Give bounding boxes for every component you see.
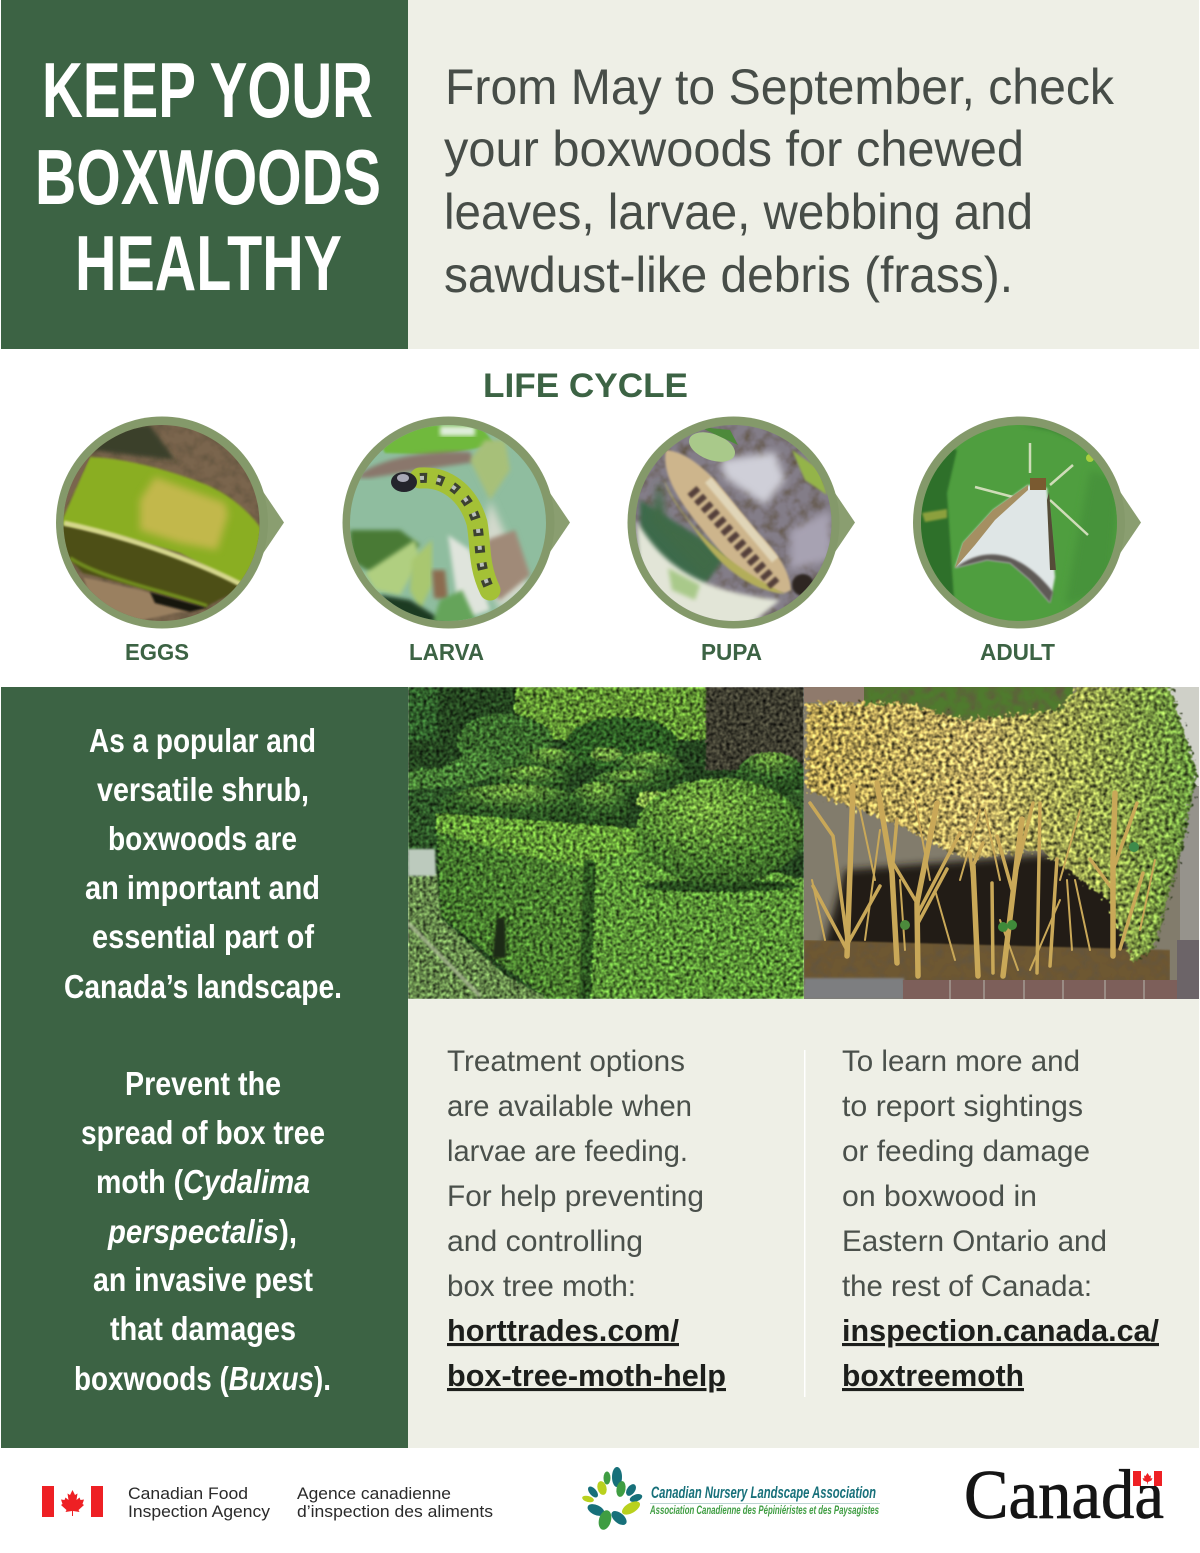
logo: Canadian Food Inspection Agency: Agence canadienne	[297, 1484, 451, 1503]
icon: leaf tree	[581, 1467, 643, 1531]
logo: Canadian Nursery Landscape Association: Canadian Nursery Landscape Association	[651, 1483, 876, 1502]
heading: keep your boxwoods healthy	[35, 46, 381, 307]
text: treatment options: and controlling	[447, 1225, 643, 1258]
text: prevent the spread	[74, 1065, 331, 1397]
logo: Canadian Food Inspection Agency: Inspection Agency	[128, 1502, 271, 1521]
text: report sightings	[842, 1045, 1159, 1393]
text: prevent the spread: spread of box tree	[81, 1114, 325, 1151]
text: importance of boxwoods: As a popular and	[89, 722, 316, 759]
text: prevent the spread: perspectalis),	[107, 1213, 297, 1250]
text: prevent the spread: an invasive pest	[93, 1261, 313, 1298]
photo: eggs on leaf	[60, 420, 265, 625]
intro text: your boxwoods for chewed	[444, 121, 1024, 177]
logo: Canadian Food Inspection Agency	[42, 1484, 493, 1521]
text: treatment options: larvae are feeding.	[447, 1135, 688, 1168]
logo: Canadian Nursery Landscape Association	[581, 1467, 880, 1531]
intro text: sawdust-like debris (frass).	[444, 247, 1013, 303]
photo: larva on webbing	[345, 420, 550, 625]
photo: healthy boxwood garden	[400, 680, 810, 1010]
icon: wordmark flag	[1133, 1471, 1162, 1486]
text: report sightings: the rest of Canada:	[842, 1270, 1092, 1303]
text: treatment options: are available when	[447, 1090, 692, 1123]
label: larva: LARVA	[409, 639, 484, 665]
text: prevent the spread: that damages	[110, 1310, 296, 1347]
panel: intro	[408, 0, 1199, 349]
text: treatment options	[447, 1045, 726, 1393]
text: report sightings: boxtreemoth	[842, 1358, 1024, 1393]
text: importance of boxwoods: versatile shrub,	[97, 771, 309, 808]
text: treatment options: horttrades.com/	[447, 1313, 679, 1348]
text: importance of boxwoods: boxwoods are	[108, 820, 297, 857]
text: importance of boxwoods	[64, 722, 342, 1005]
panel: title block	[1, 0, 408, 349]
life cycle stage: larva	[342, 416, 570, 628]
heading: life cycle: LIFE CYCLE	[483, 367, 688, 405]
text: report sightings: on boxwood in	[842, 1180, 1037, 1213]
text: importance of boxwoods: essential part of	[92, 918, 315, 955]
text: treatment options: Treatment options	[447, 1045, 685, 1078]
text: report sightings: To learn more and	[842, 1045, 1080, 1078]
label: eggs: EGGS	[125, 639, 189, 665]
heading: keep your boxwoods healthy: HEALTHY	[75, 219, 342, 307]
text: report sightings: inspection.canada.ca/	[842, 1313, 1159, 1348]
heading: keep your boxwoods healthy: KEEP YOUR	[42, 46, 373, 134]
panel: boxwood message	[1, 687, 408, 1448]
life cycle stage: adult	[913, 416, 1141, 630]
heading: keep your boxwoods healthy: BOXWOODS	[35, 133, 381, 221]
label: adult: ADULT	[980, 639, 1055, 665]
intro text: From May to September, check	[445, 59, 1115, 115]
panel: information	[408, 999, 1199, 1448]
text: importance of boxwoods: Canada’s landscape.	[64, 968, 342, 1005]
text: report sightings: to report sightings	[842, 1090, 1083, 1123]
logo: Canadian Food Inspection Agency: Canadian Food	[128, 1484, 248, 1503]
label: pupa: PUPA	[701, 639, 762, 665]
text: prevent the spread: Prevent the	[125, 1065, 281, 1102]
text: prevent the spread: moth (Cydalima	[96, 1163, 310, 1200]
logo: Canadian Food Inspection Agency: d’inspection des aliments	[297, 1502, 493, 1521]
intro text: leaves, larvae, webbing and	[444, 184, 1033, 240]
logo: Canadian Nursery Landscape Association: Association Canadienne des Pépiniéristes et des Paysagistes	[649, 1503, 879, 1517]
icon: Canadian flag	[42, 1486, 103, 1517]
photo: adult moth on leaf	[921, 425, 1117, 621]
photo: pupa in cocoon	[630, 420, 835, 625]
text: prevent the spread: boxwoods (Buxus).	[74, 1360, 331, 1397]
life cycle stage: pupa	[628, 416, 855, 628]
intro text	[444, 59, 1115, 303]
text: report sightings: or feeding damage	[842, 1135, 1090, 1168]
text: treatment options: box-tree-moth-help	[447, 1358, 726, 1393]
text: report sightings: Eastern Ontario and	[842, 1225, 1107, 1258]
logo: Canada wordmark: Canada	[964, 1457, 1164, 1534]
text: treatment options: box tree moth:	[447, 1270, 636, 1303]
text: importance of boxwoods: an important and	[85, 869, 320, 906]
life cycle stage: eggs	[56, 416, 284, 628]
text: treatment options: For help preventing	[447, 1180, 704, 1213]
photo: damaged boxwood hedge	[804, 680, 1200, 999]
